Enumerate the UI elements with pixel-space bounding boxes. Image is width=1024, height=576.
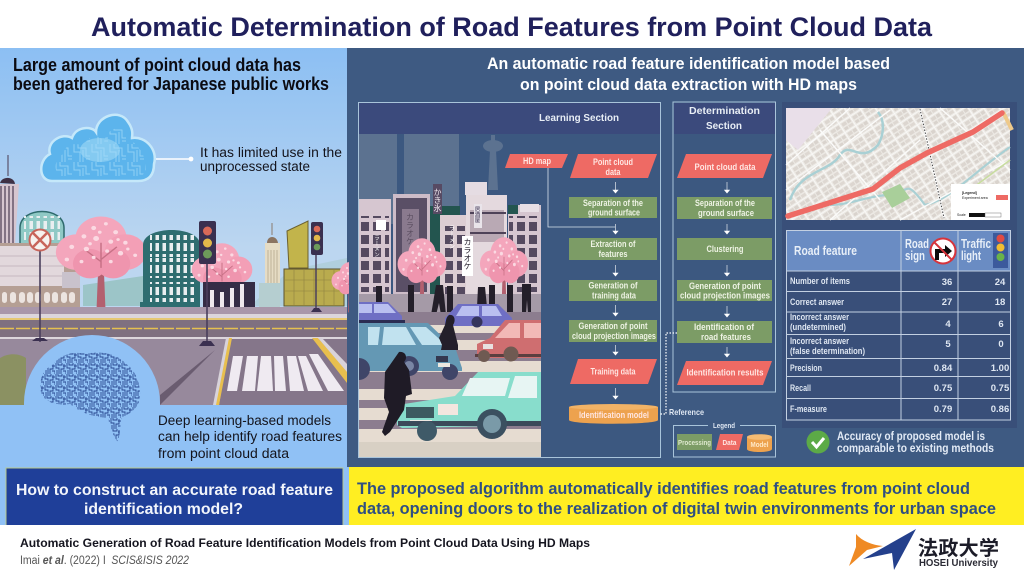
row: correct answer: 18 <box>995 297 1005 308</box>
row: precision <box>790 363 1009 374</box>
point cloud data <box>677 154 772 178</box>
legend: processing: Processing <box>678 438 711 447</box>
cherry tree two <box>192 243 252 314</box>
text: deep learning <box>158 413 342 461</box>
point cloud data: Point cloud <box>593 157 633 168</box>
pedestrians far <box>359 284 541 312</box>
row: number of items: Number of items <box>790 276 850 287</box>
connector line from cloud <box>156 157 193 161</box>
signs: ラーメン <box>448 225 456 249</box>
logo: Hosei University: HOSEI University <box>919 558 998 569</box>
row: incorrect false determination <box>790 336 1004 357</box>
red car <box>475 320 541 362</box>
row: precision: Precision <box>790 363 822 374</box>
legend: Legend <box>713 421 735 430</box>
row: incorrect undetermined: 4 <box>945 319 951 330</box>
callout: conclusion: data, opening doors to the realization of digital twin environments for urban space <box>357 499 996 518</box>
signs: 居酒屋 <box>474 206 482 224</box>
signs: カラオケ <box>462 238 473 270</box>
training data: Training data <box>590 366 636 378</box>
projection image step: Generation of point <box>578 321 648 332</box>
projection image step: cloud projection images <box>572 331 656 342</box>
cherry tree one <box>56 216 146 312</box>
text: deep learning: can help identify road features <box>158 429 342 444</box>
training data generation step: training data <box>592 290 637 302</box>
clustering step <box>677 238 772 260</box>
teal dome building <box>20 212 64 245</box>
man silhouette <box>439 315 458 350</box>
crosswalk stripes <box>359 312 541 457</box>
cherry tree three <box>332 262 368 312</box>
logo: Hosei University <box>849 529 999 570</box>
row: recall <box>790 383 1010 394</box>
heading: determination section <box>689 105 760 132</box>
table header: sign <box>905 248 925 263</box>
callout: research question: How to construct an accurate road feature <box>16 482 333 499</box>
road sign <box>30 230 50 342</box>
woman silhouette <box>382 352 412 436</box>
icon: road sign <box>930 238 956 264</box>
panel: results <box>782 102 1017 428</box>
table grid <box>786 230 1011 420</box>
row: incorrect undetermined: 6 <box>998 319 1004 330</box>
footer strip <box>0 525 1024 576</box>
identification results: Identification results <box>686 368 764 378</box>
row: f-measure: 0.79 <box>934 404 952 415</box>
row: incorrect undetermined: (undetermined) <box>790 322 846 333</box>
arrows <box>724 182 730 357</box>
separation step <box>569 197 657 218</box>
arrows <box>613 182 618 399</box>
row: recall: 0.75 <box>991 383 1010 394</box>
point cloud data: data <box>606 167 621 178</box>
point cloud data <box>570 154 657 178</box>
low building <box>0 243 80 307</box>
dark shop fronts <box>203 282 255 307</box>
title: Automatic Determination of Road Features from Point Cloud Data <box>91 12 933 42</box>
signs: カラオケ <box>404 213 416 245</box>
teal apartment building <box>140 230 200 307</box>
citation title: Automatic Generation of Road Feature Identification Models from Point Cloud Data Using HD Maps <box>20 536 590 550</box>
heading: determination section: Determination <box>689 105 760 117</box>
row: f-measure <box>790 404 1009 415</box>
icon: circuit brain <box>24 335 160 471</box>
row: correct answer: 27 <box>942 297 952 308</box>
text: accuracy conclusion <box>837 431 994 455</box>
flowchart: learning <box>505 154 658 424</box>
legend: model: Model <box>750 440 768 449</box>
row: incorrect false determination: (false determination) <box>790 346 865 357</box>
beige tower <box>259 223 280 307</box>
row: incorrect false determination: 5 <box>945 339 951 350</box>
projection image step <box>677 280 772 302</box>
point cloud data: Point cloud data <box>694 162 756 173</box>
callout: research question <box>0 467 349 528</box>
legend: data: Data <box>722 438 737 447</box>
header band <box>359 103 660 134</box>
row: correct answer <box>790 297 1005 308</box>
row: precision: 0.84 <box>934 363 953 374</box>
extraction step: features <box>598 249 628 260</box>
row: incorrect false determination: 0 <box>998 339 1004 350</box>
sidewalk and road <box>0 307 347 405</box>
clustering step: Clustering <box>706 244 744 255</box>
callout: conclusion <box>349 467 1024 525</box>
table header: Traffic <box>961 236 991 251</box>
identification results <box>677 361 772 385</box>
heading: determination section: Section <box>706 120 742 132</box>
row: correct answer: Correct answer <box>790 297 844 308</box>
training data generation step <box>569 280 657 302</box>
red route <box>788 113 1002 216</box>
crosswalk <box>227 354 344 391</box>
projection image step <box>569 320 657 342</box>
row: number of items <box>790 276 1006 288</box>
panel: proposed model <box>348 48 1024 467</box>
panel: determination section <box>673 102 776 392</box>
heading: large amount of data: Large amount of point cloud data has <box>13 55 301 75</box>
row: number of items: 24 <box>995 277 1006 288</box>
buildings <box>359 182 541 296</box>
separation step: ground surface <box>698 208 754 219</box>
HD map data <box>505 154 568 168</box>
heading: proposed model <box>487 55 890 94</box>
row: number of items: 36 <box>942 277 952 288</box>
row: recall: Recall <box>790 383 811 394</box>
extraction step <box>569 238 657 260</box>
heading: proposed model: An automatic road feature identification model based <box>487 55 890 73</box>
illustration: street scene <box>0 155 368 405</box>
text: limited use: unprocessed state <box>200 159 310 174</box>
traffic light two <box>311 222 323 312</box>
row: incorrect undetermined <box>790 312 1004 333</box>
training data <box>570 359 657 384</box>
table header <box>786 230 1011 271</box>
identification step <box>677 321 772 343</box>
identification model: Identification model <box>579 410 649 421</box>
map legend: [Legend] <box>962 191 977 195</box>
purple car two <box>445 304 512 328</box>
table: road feature results <box>786 230 1011 420</box>
reference dotted connector <box>659 333 677 414</box>
connector: HD map to extraction <box>548 168 615 227</box>
icon: circuit cloud <box>41 115 155 181</box>
cherry trees <box>398 237 528 294</box>
legend <box>674 421 776 457</box>
header band <box>674 103 775 134</box>
icon: check mark <box>806 430 830 454</box>
icon: traffic light <box>993 233 1008 268</box>
text: accuracy conclusion: Accuracy of proposed model is <box>837 431 985 443</box>
tall tower left <box>0 155 19 244</box>
purple car one <box>359 302 405 323</box>
tree bottom left <box>0 354 26 405</box>
heading: large amount of data: been gathered for Japanese public works <box>13 74 329 94</box>
row: f-measure: 0.86 <box>991 404 1009 415</box>
row: f-measure: F-measure <box>790 404 827 415</box>
separation step: ground surface <box>588 208 640 218</box>
row: incorrect false determination: Incorrect answer <box>790 336 849 347</box>
projection image step: Generation of point <box>689 281 762 292</box>
map legend: Scale <box>957 213 966 217</box>
table header: light <box>961 248 981 263</box>
table header: Road feature <box>794 243 857 258</box>
separation step <box>677 197 772 219</box>
table header: Road <box>905 236 929 251</box>
identification step: Identification of <box>694 322 755 333</box>
text: deep learning: Deep learning-based models <box>158 413 331 428</box>
separation step: Separation of the <box>583 198 643 209</box>
signs: ラーメン <box>373 235 381 257</box>
illustration: city crossing <box>348 126 541 457</box>
separation step: Separation of the <box>695 198 755 209</box>
logo text: 法政大学 <box>918 532 999 561</box>
HD map data: HD map <box>523 156 551 167</box>
identification model <box>569 404 658 424</box>
row: precision: 1.00 <box>991 363 1009 374</box>
label: reference: Reference <box>669 407 704 417</box>
projection image step: cloud projection images <box>680 290 770 302</box>
row: incorrect undetermined: Incorrect answer <box>790 312 849 323</box>
logo mark <box>849 529 916 570</box>
panel: learning section <box>348 102 660 458</box>
map legend <box>951 184 1010 220</box>
heading: proposed model: on point cloud data extraction with HD maps <box>520 76 857 94</box>
panel: background and motivation <box>0 48 368 471</box>
map legend: Experiment area <box>962 196 988 200</box>
teal car <box>397 372 541 441</box>
heading: large amount of data <box>13 55 329 94</box>
training data generation step: Generation of <box>588 280 638 292</box>
identification step: road features <box>701 332 751 343</box>
blue car <box>348 323 462 380</box>
callout: research question: identification model? <box>84 501 243 518</box>
extraction step: Extraction of <box>590 239 636 250</box>
signs: かき氷 <box>432 188 443 212</box>
text: limited use: It has limited use in the <box>200 145 342 160</box>
text: deep learning: from point cloud data <box>158 446 290 461</box>
text: limited use <box>200 145 342 174</box>
row: recall: 0.75 <box>934 383 953 394</box>
signs <box>373 186 482 276</box>
text: accuracy conclusion: comparable to existing methods <box>837 443 994 455</box>
yellow buildings <box>284 221 344 306</box>
traffic light one <box>199 221 216 346</box>
citation details: Imai et al. (2022) I SCIS&ISIS 2022 <box>20 555 190 567</box>
map: experiment area <box>786 108 1012 220</box>
callout: conclusion: The proposed algorithm automatically identifies road features from point cloud <box>357 479 970 498</box>
heading: learning section: Learning Section <box>539 112 619 124</box>
